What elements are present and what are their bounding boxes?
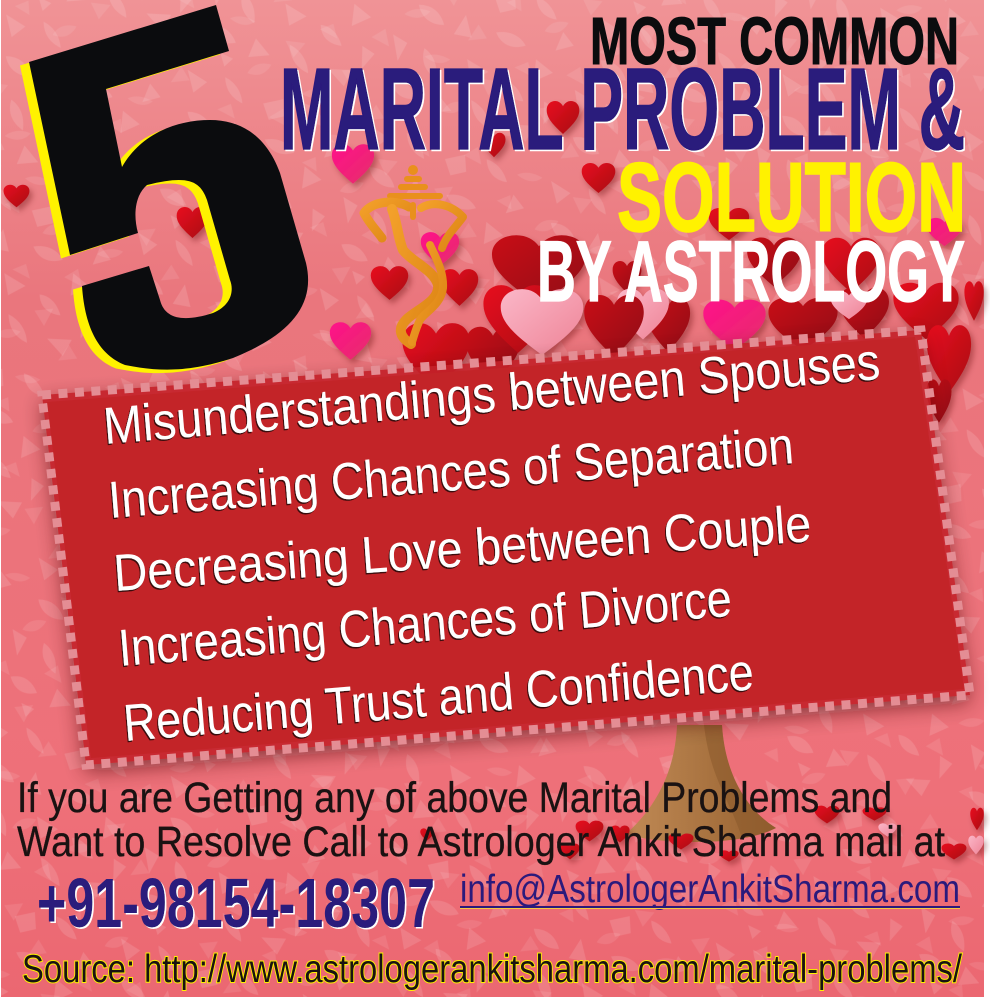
problem list text [101,333,882,753]
problem list text: Decreasing Love between Couple [112,495,813,603]
icon: ganesha [364,165,463,344]
big number 5 [20,5,308,373]
panel: problems list [42,330,970,765]
tree trunk [626,725,776,842]
panel shape [42,330,970,765]
phone number: +91-98154-18307 [37,864,435,942]
problem list text: Reducing Trust and Confidence [121,643,756,753]
problem list text: Increasing Chances of Divorce [116,570,734,678]
call to action text [17,774,945,866]
problem list text: Misunderstandings between Spouses [101,333,882,456]
problem list text: Increasing Chances of Separation [106,417,796,530]
hearts cluster behind headings and panel [4,101,984,423]
hearts near the bottom text [420,806,984,862]
